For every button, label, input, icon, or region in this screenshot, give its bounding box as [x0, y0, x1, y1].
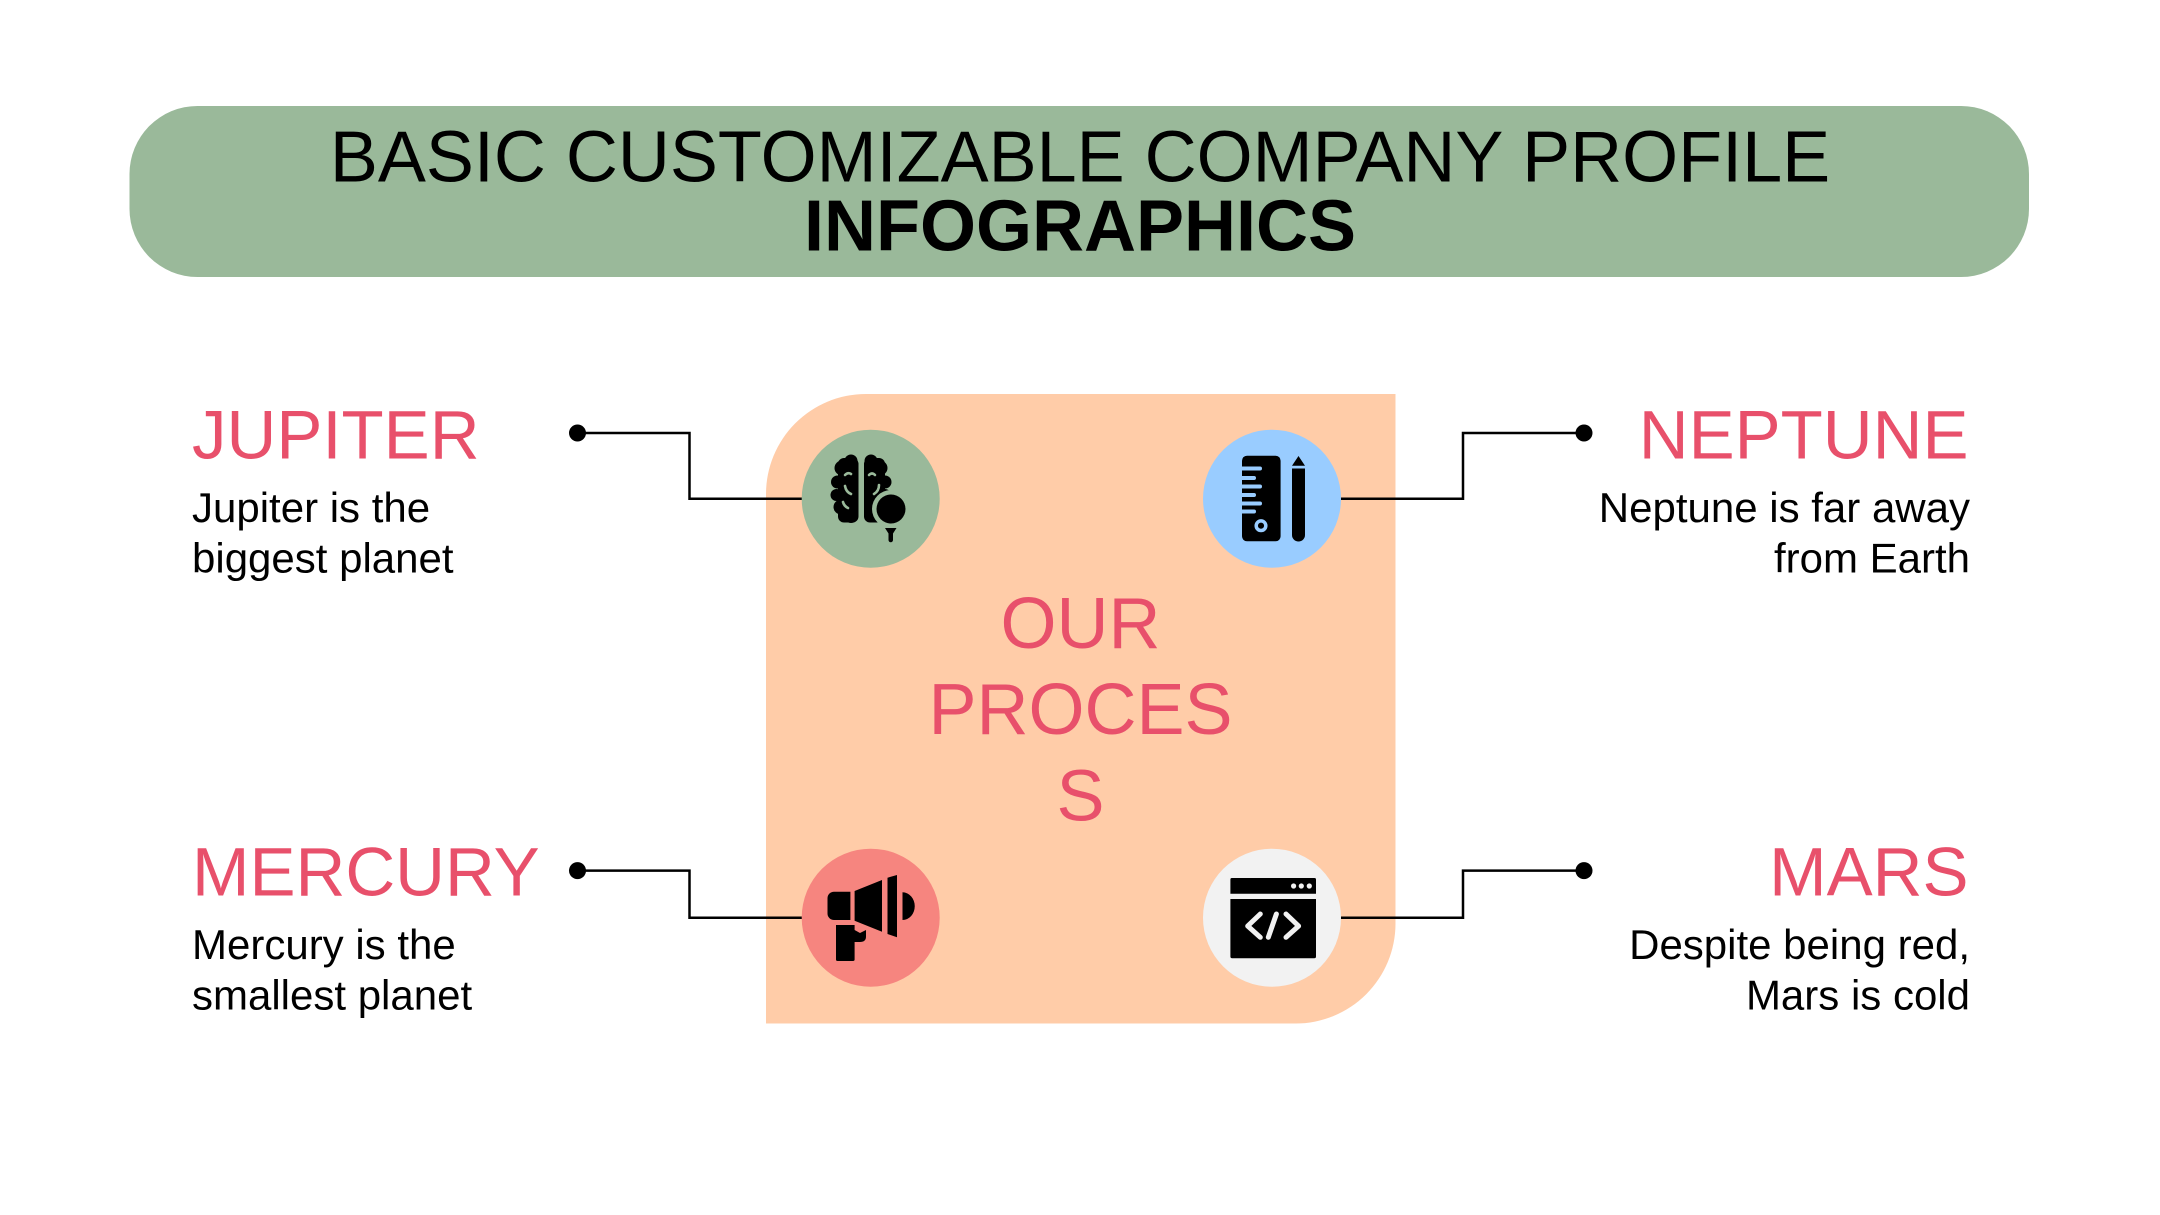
text block: mercury — [192, 834, 540, 1018]
text block: jupiter: biggest planet — [192, 534, 454, 582]
text block: mars: Mars is cold — [1746, 972, 1970, 1018]
text block: mars: Despite being red, — [1629, 921, 1970, 968]
icon: megaphone — [802, 849, 940, 987]
text block: neptune: from Earth — [1774, 534, 1970, 582]
title: BASIC CUSTOMIZABLE COMPANY PROFILE — [330, 118, 1830, 198]
title: INFOGRAPHICS — [804, 186, 1356, 266]
connector: neptune — [1341, 424, 1592, 499]
text block: neptune: Neptune is far away — [1599, 484, 1970, 531]
icon: brain with golf ball — [802, 430, 940, 568]
central heading: our process — [928, 584, 1233, 836]
central heading: our process: PROCES — [928, 670, 1233, 750]
text block: jupiter — [192, 396, 480, 582]
icon: code window — [1203, 849, 1341, 987]
connector: mercury — [569, 862, 802, 918]
connector: jupiter — [569, 424, 802, 499]
title banner — [130, 106, 2029, 277]
central heading: our process: S — [1056, 756, 1105, 836]
text block: mercury: Mercury is the — [192, 921, 456, 968]
text block: neptune: NEPTUNE — [1639, 396, 1968, 474]
title — [330, 118, 1830, 266]
central heading: our process: OUR — [1000, 584, 1160, 664]
text block: mars — [1629, 834, 1970, 1018]
connector: mars — [1341, 862, 1592, 918]
text block: mercury: smallest planet — [192, 972, 472, 1018]
text block: neptune — [1599, 396, 1970, 582]
text block: mercury: MERCURY — [192, 834, 540, 910]
panel: our process — [766, 394, 1396, 1024]
text block: jupiter: JUPITER — [192, 396, 480, 474]
text block: jupiter: Jupiter is the — [192, 484, 430, 531]
text block: mars: MARS — [1769, 834, 1968, 910]
icon: ruler and pencil — [1203, 430, 1341, 568]
